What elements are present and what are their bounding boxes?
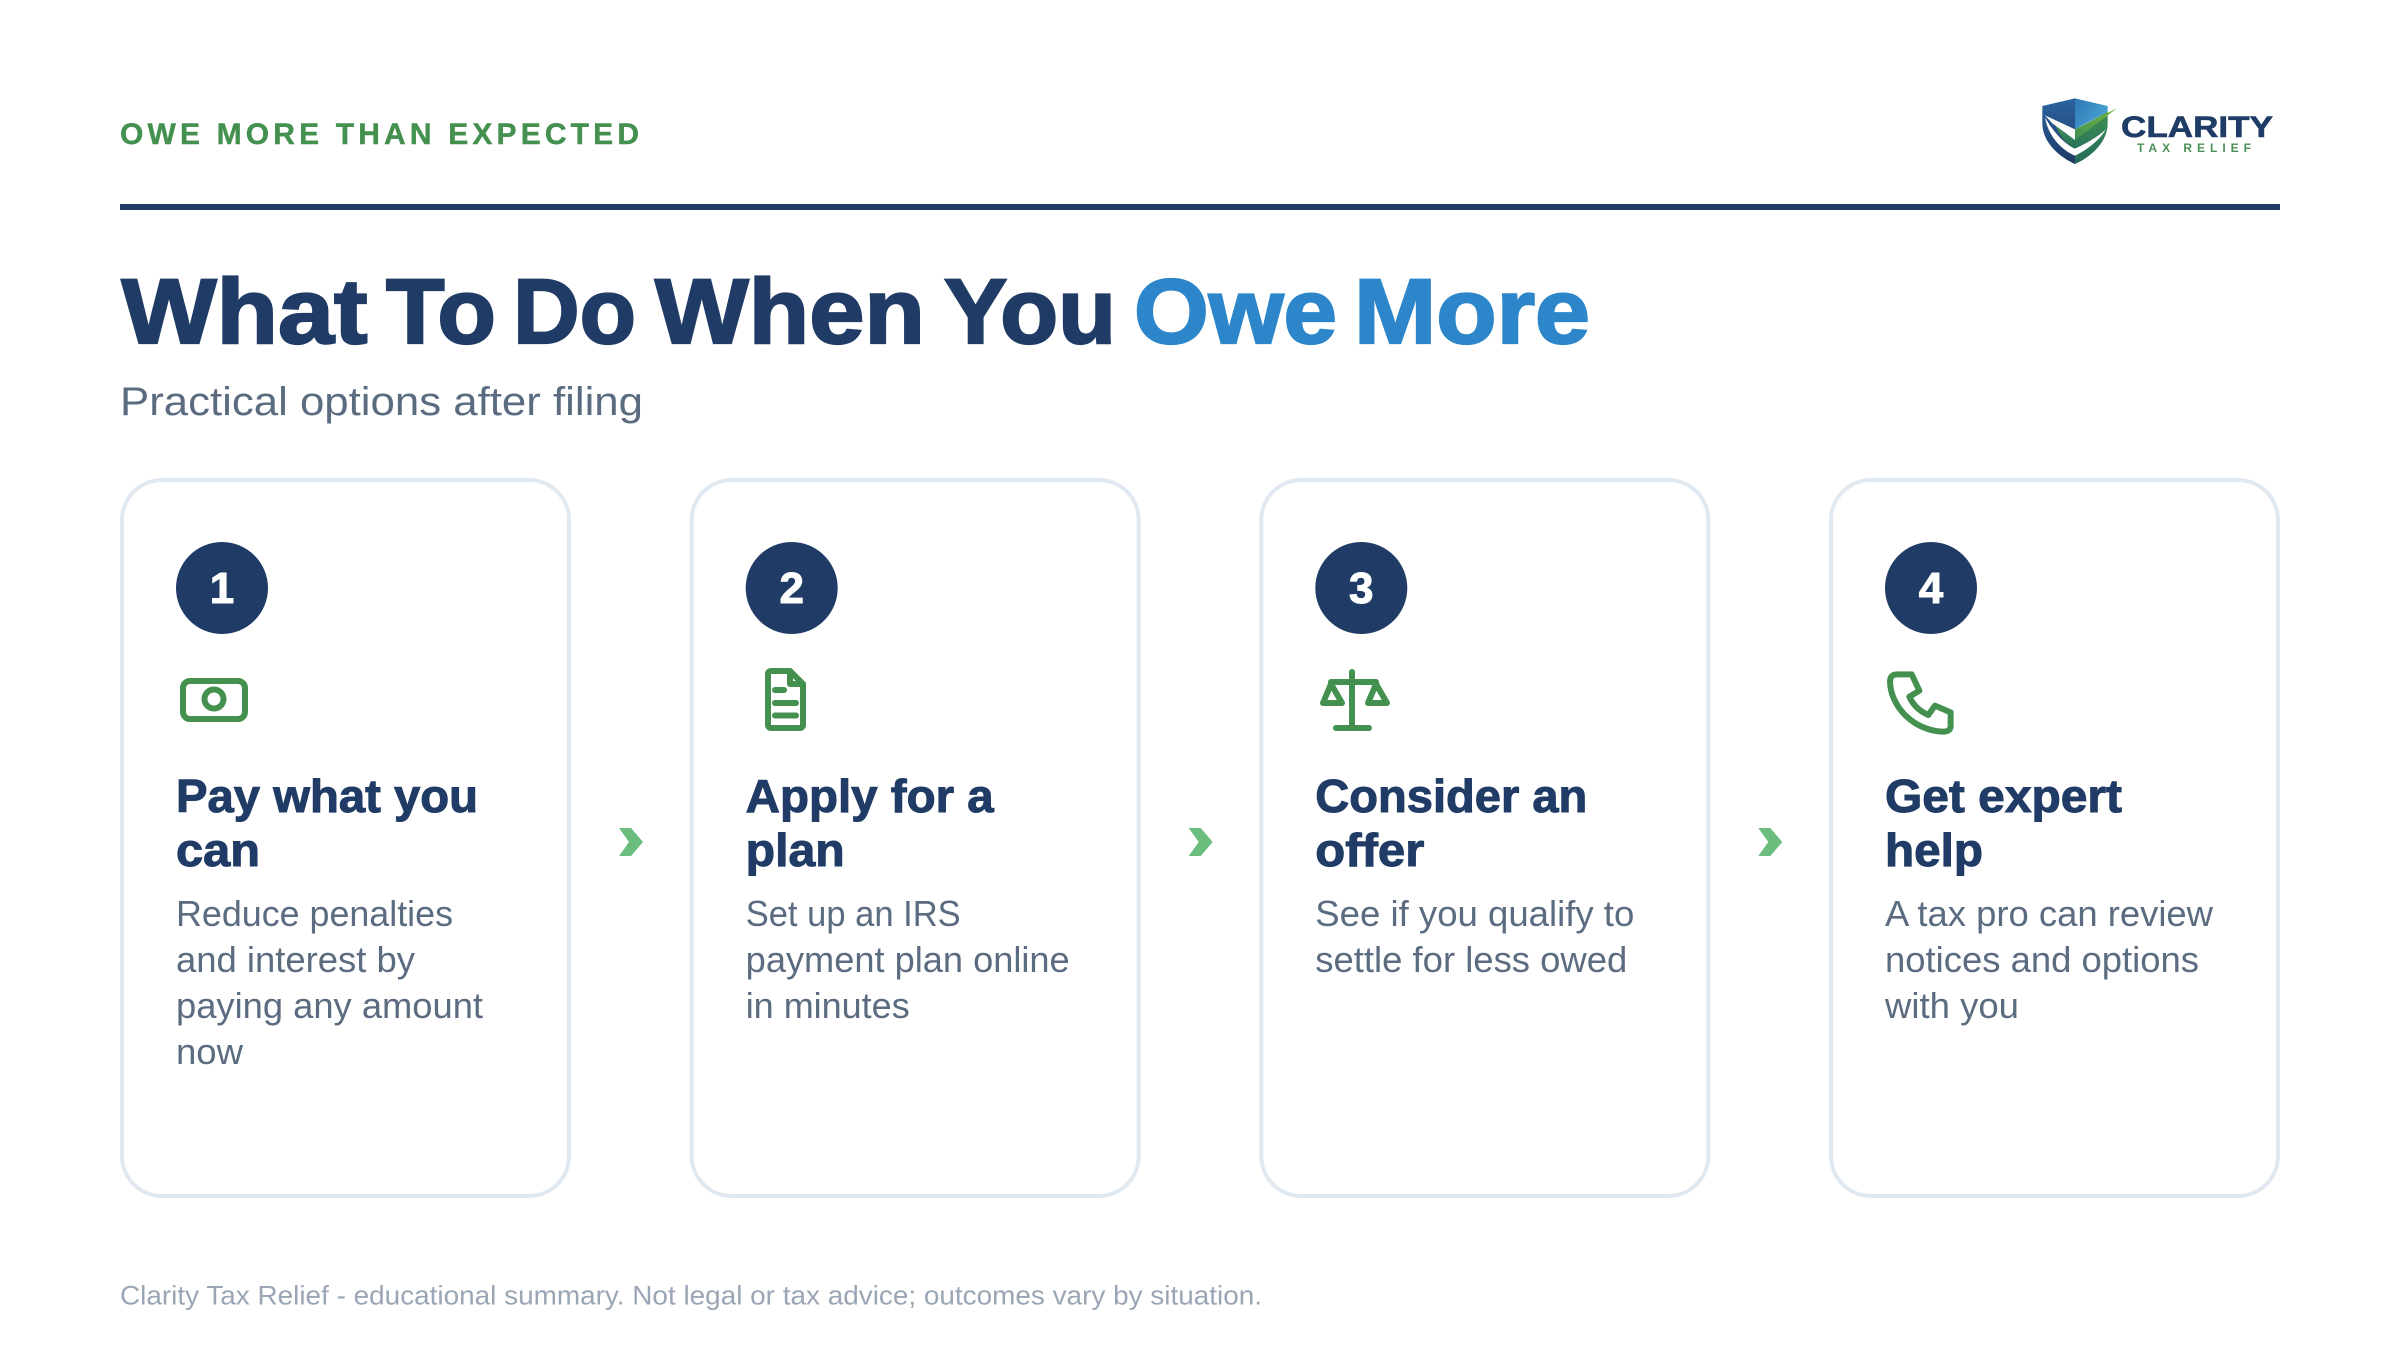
title: More [1354,261,1590,363]
step 1 description: now [176,1031,244,1072]
step 2 description: Set up an IRS [746,893,961,934]
logo tagline: TAX RELIEF [2137,141,2251,155]
step number 4 [1885,542,1977,634]
footer disclaimer: Clarity Tax Relief - educational summary. Not legal or tax advice; outcomes vary by situation. [120,1280,1262,1310]
step number 3 [1315,542,1407,634]
step 3 description [1315,893,1634,980]
logo wordmark: CLARITY [2121,111,2273,144]
panel: step 2 apply for a plan [692,480,1139,1196]
step 2 description: in minutes [746,985,910,1026]
icon: shield [2042,98,2117,164]
step 4 heading [1885,770,2122,876]
panel: step 1 pay what you can [122,480,569,1196]
title: When [655,261,925,363]
icon: phone [1890,674,1951,732]
icon: scales [1323,672,1387,728]
step number 2 [746,542,838,634]
title: To [386,261,496,363]
step number 2: 2 [779,564,804,613]
step 2 heading [746,770,994,876]
step number 1 [176,542,268,634]
step 4 description: notices and options [1885,939,2199,980]
step 1 description: and interest by [176,939,415,980]
subtitle: Practical options after filing [120,380,643,424]
step 1 description: Reduce penalties [176,893,453,934]
step 2 heading: Apply for a [746,770,994,822]
step 3 description: See if you qualify to [1315,893,1634,934]
step 4 heading: help [1885,824,1983,876]
step 4 description: A tax pro can review [1885,893,2214,934]
title: You [944,261,1116,363]
step 3 description: settle for less owed [1315,939,1627,980]
step number 1: 1 [210,564,234,613]
step 4 description: with you [1884,985,2019,1026]
step 4 heading: Get expert [1885,770,2122,822]
step 1 description: paying any amount [176,985,483,1026]
step 4 description [1884,893,2214,1026]
icon: document [768,671,803,728]
step number 3: 3 [1349,564,1374,613]
step 3 heading: offer [1315,824,1424,876]
title: What [122,261,368,363]
logo: Clarity Tax Relief [2042,98,2273,164]
step 3 heading [1315,770,1587,876]
step 2 description: payment plan online [746,939,1070,980]
arrow 3 [1758,828,1782,856]
step 1 heading: can [176,824,260,876]
panel: step 3 consider an offer [1261,480,1708,1196]
step 3 heading: Consider an [1315,770,1587,822]
eyebrow heading: OWE MORE THAN EXPECTED [120,118,639,151]
icon: money [183,681,245,719]
panel: step 4 get expert help [1831,480,2278,1196]
step 1 description [176,893,483,1072]
step number 4: 4 [1919,564,1944,613]
arrow 1 [619,828,643,856]
step 2 heading: plan [746,824,845,876]
arrow 2 [1189,828,1213,856]
title: Owe [1134,261,1337,363]
title: Do [513,261,636,363]
step 1 heading [176,770,478,876]
step 1 heading: Pay what you [176,770,478,822]
step 2 description [746,893,1070,1026]
